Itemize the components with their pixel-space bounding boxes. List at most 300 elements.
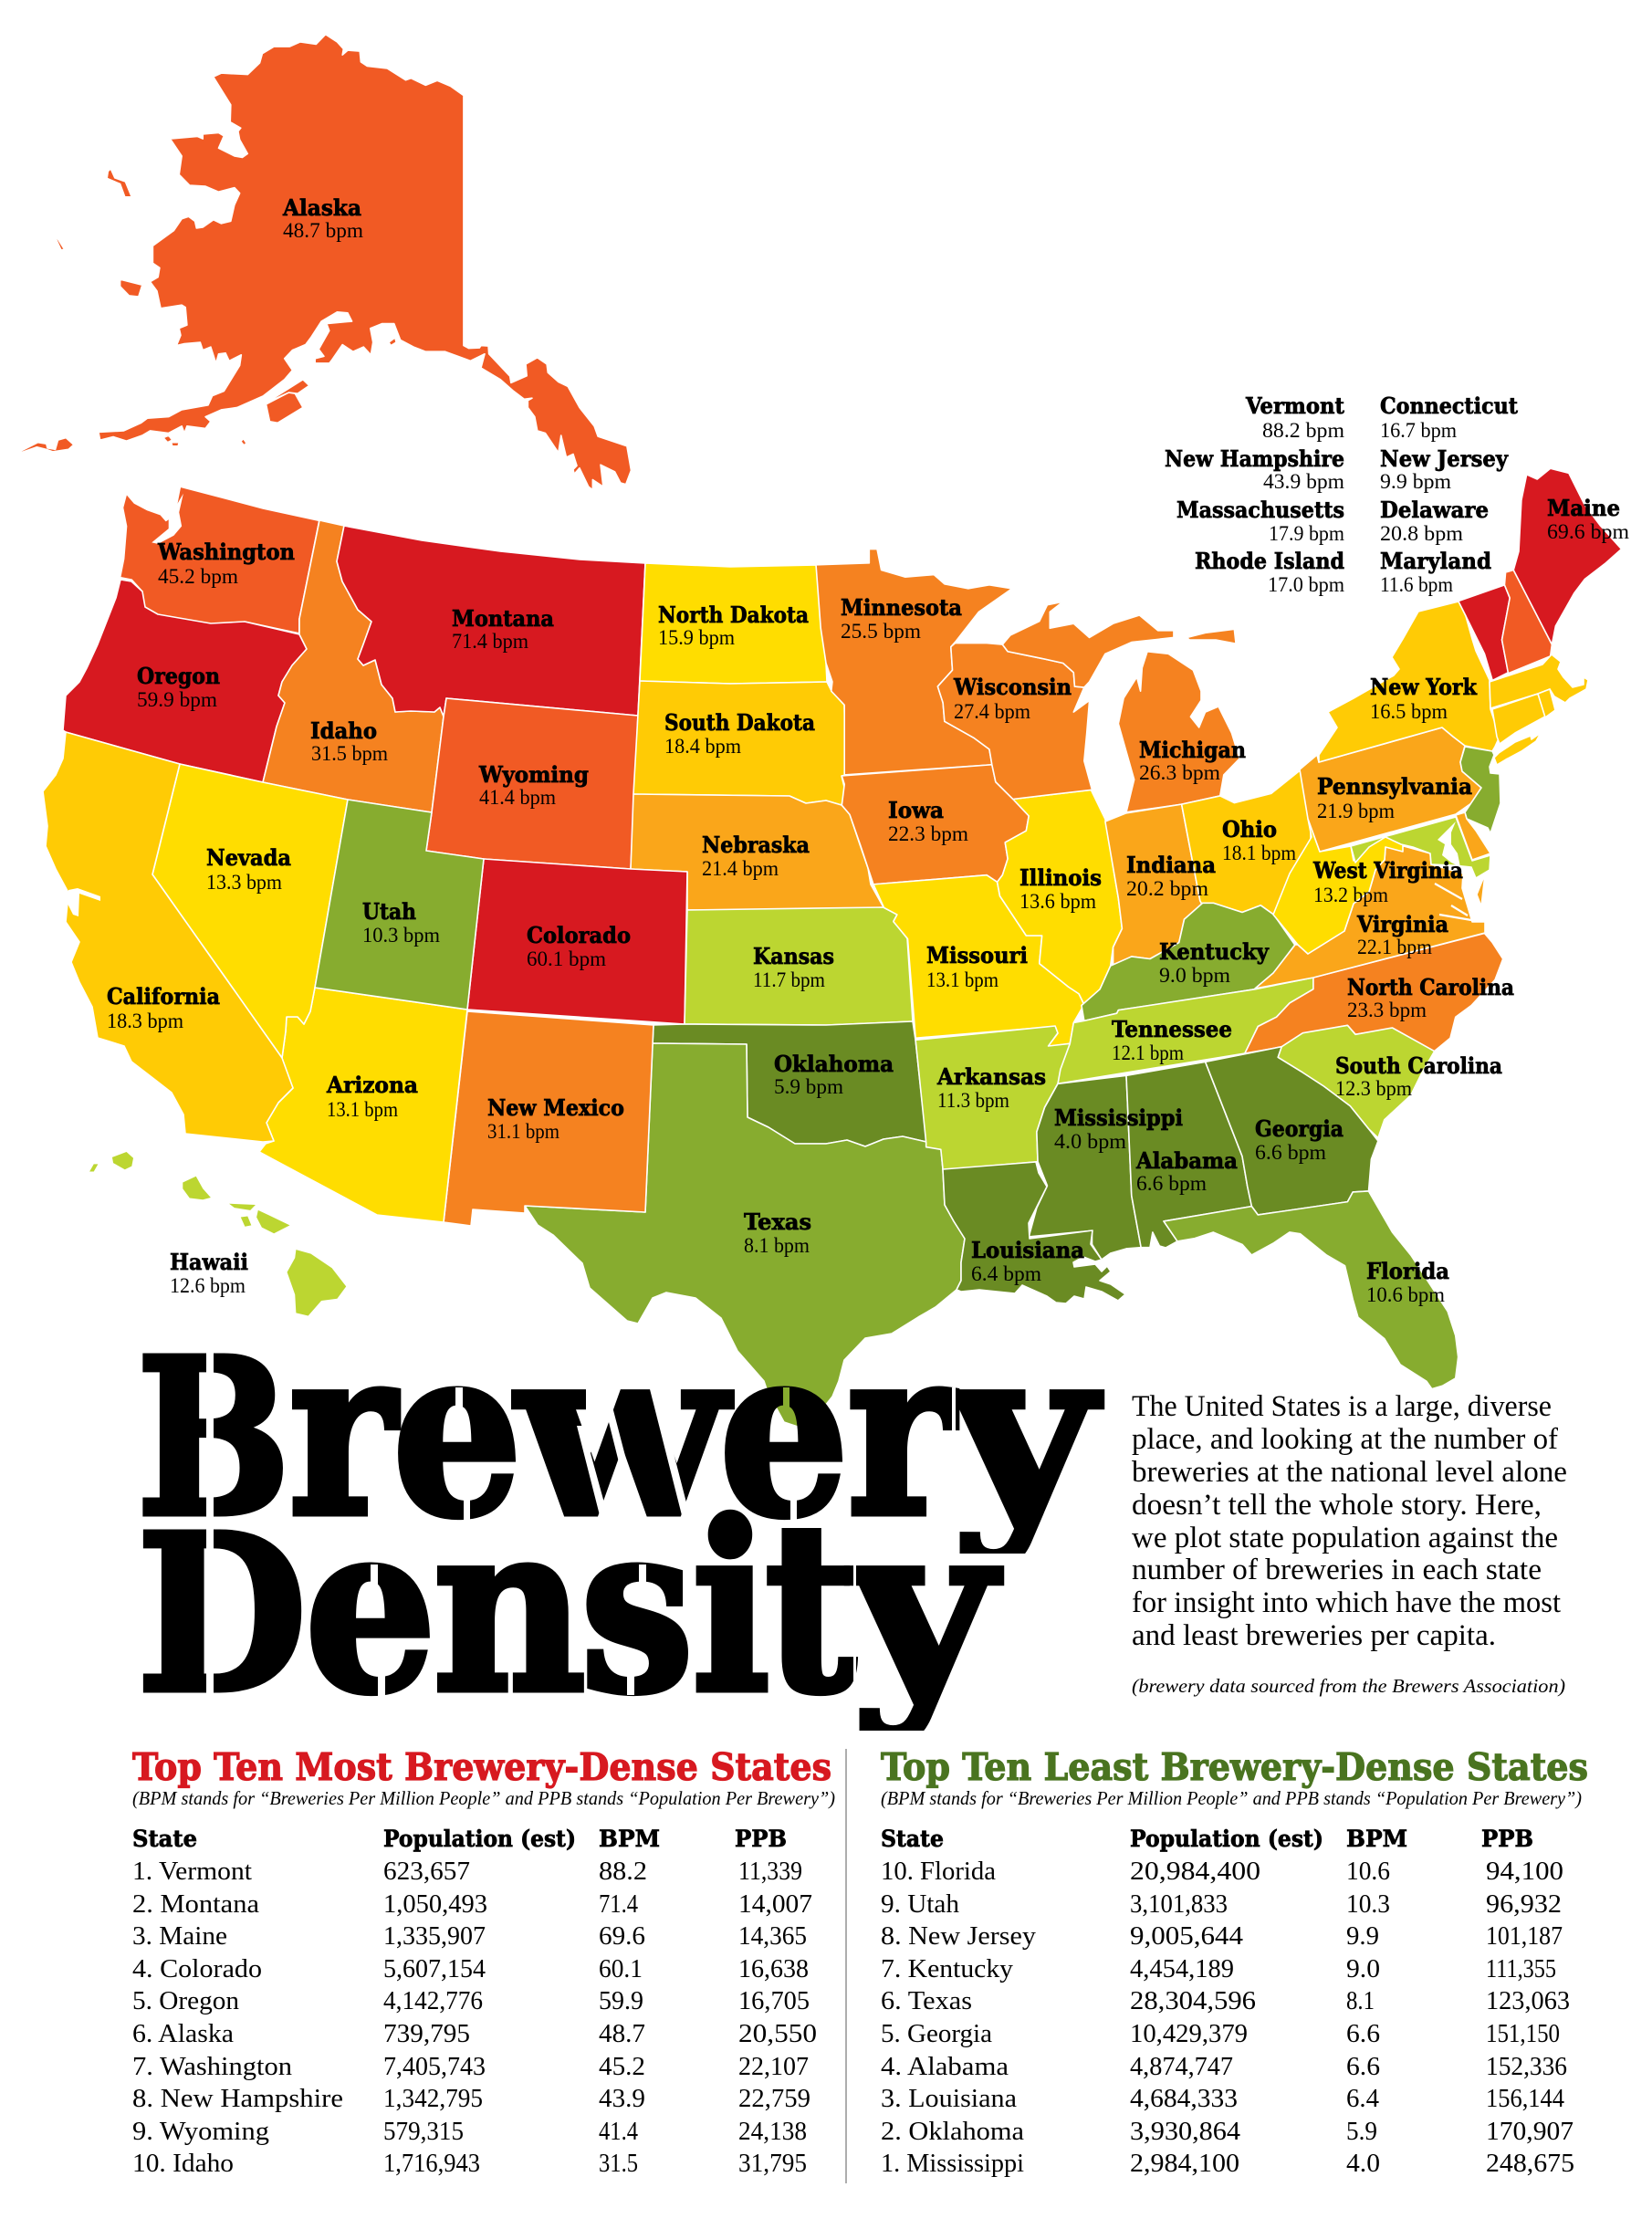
row 3: 1,335,907 <box>383 1921 486 1951</box>
title: Brewery Density: e <box>305 1472 436 1745</box>
label: Hawaii: Hawaii <box>170 1249 248 1275</box>
row 3: 3. Louisiana <box>881 2084 1017 2113</box>
label: Maryland: 11.6 bpm <box>1380 573 1453 597</box>
state: Washington <box>120 487 319 633</box>
label: Maryland <box>1380 548 1491 597</box>
label: Illinois: Illinois <box>1019 864 1102 891</box>
label: New Jersey: New Jersey <box>1380 445 1509 472</box>
inlets: Virginia tidal rivers <box>1435 884 1471 920</box>
state: Iowa <box>842 765 1029 884</box>
table: most brewery-dense states <box>132 1745 835 2178</box>
inlet: Chesapeake Bay <box>1438 821 1460 867</box>
row 2 <box>132 1889 812 1919</box>
label: Connecticut: Connecticut <box>1380 392 1518 419</box>
label: Pennsylvania: 21.9 bpm <box>1317 800 1395 823</box>
title: Brewery Density: B <box>137 1311 290 1564</box>
row 10: 20,984,400 <box>1130 1857 1260 1886</box>
row 9: 24,138 <box>738 2117 807 2146</box>
column headers: Population (est) <box>1130 1826 1323 1852</box>
label: Wisconsin <box>953 674 1072 724</box>
row 4: 4,874,747 <box>1130 2052 1233 2081</box>
label: New York: New York <box>1370 674 1478 700</box>
state: New Jersey <box>1460 747 1500 833</box>
label: Wyoming <box>478 761 589 810</box>
label: Colorado: Colorado <box>527 922 631 948</box>
label: Ohio: 18.1 bpm <box>1222 842 1296 865</box>
label: Kentucky: Kentucky <box>1159 938 1270 965</box>
label: New Hampshire: 43.9 bpm <box>1263 470 1344 494</box>
row 7: 4,454,189 <box>1130 1954 1234 1983</box>
label: South Dakota <box>664 709 815 759</box>
state: Alaska <box>19 35 631 490</box>
column headers: PPB <box>735 1826 787 1852</box>
label: South Carolina <box>1335 1052 1502 1101</box>
column headers: BPM <box>1346 1826 1407 1852</box>
label: Wyoming: Wyoming <box>478 761 589 788</box>
label: Connecticut: 16.7 bpm <box>1380 419 1457 443</box>
label: Maryland: Maryland <box>1380 548 1491 574</box>
row 5: 151,150 <box>1486 2019 1560 2048</box>
row 1: 248,675 <box>1486 2149 1574 2178</box>
label: Alaska <box>282 194 363 243</box>
title: Brewery Density <box>137 1296 1104 1753</box>
row 8: 1,342,795 <box>383 2084 483 2113</box>
column headers: BPM <box>599 1826 660 1852</box>
row 10 <box>881 1857 1563 1886</box>
label: Idaho: 31.5 bpm <box>311 742 388 766</box>
title: Brewery Density: i <box>692 1472 770 1745</box>
label: Missouri: 13.1 bpm <box>926 968 999 992</box>
label: Arizona <box>326 1072 418 1122</box>
row 7: 22,107 <box>738 2052 809 2081</box>
label: Oklahoma: Oklahoma <box>774 1051 894 1077</box>
row 2 <box>881 2117 1574 2146</box>
row 6: 6. Texas <box>881 1986 972 2015</box>
label: Delaware <box>1380 497 1489 546</box>
row 1: 88.2 <box>599 1857 647 1886</box>
label: North Carolina: 23.3 bpm <box>1347 999 1427 1022</box>
row 1: 11,339 <box>738 1857 802 1886</box>
row 8: 8. New Jersey <box>881 1921 1037 1951</box>
row 7 <box>132 2052 809 2081</box>
label: Nevada <box>206 844 291 895</box>
label: Alabama <box>1135 1147 1238 1196</box>
row 10: 10.6 <box>1346 1857 1390 1886</box>
label: Michigan: Michigan <box>1139 737 1246 763</box>
label: South Carolina: 12.3 bpm <box>1335 1077 1412 1101</box>
label: Vermont: Vermont <box>1245 392 1344 419</box>
state: Nebraska <box>631 794 884 910</box>
label: Utah: Utah <box>362 898 416 925</box>
state: Kansas <box>685 907 913 1025</box>
intro paragraph: number of breweries in each state <box>1132 1554 1542 1586</box>
intro paragraph: The United States is a large, diverse <box>1132 1390 1552 1423</box>
label: Alaska: Alaska <box>282 194 361 221</box>
row 7: 7. Kentucky <box>881 1954 1014 1983</box>
row 1 <box>881 2149 1574 2178</box>
label: Oregon <box>137 663 220 712</box>
map of the United States <box>19 35 1622 1427</box>
label: Utah <box>362 898 440 947</box>
label: Wyoming: 41.4 bpm <box>479 786 556 810</box>
row 8 <box>132 2084 810 2113</box>
label: New Jersey: 9.9 bpm <box>1380 470 1451 494</box>
label: Minnesota: Minnesota <box>841 594 962 621</box>
label: Florida <box>1366 1258 1449 1307</box>
state: Wyoming <box>426 698 638 869</box>
title: Brewery Density: n <box>433 1472 586 1745</box>
row 4: 6.6 <box>1346 2052 1380 2081</box>
label: Tennessee: Tennessee <box>1112 1016 1232 1042</box>
state: Tennessee <box>1058 978 1313 1083</box>
column headers <box>132 1826 787 1852</box>
label: Kansas <box>753 943 834 992</box>
row 10 <box>132 2149 807 2178</box>
label: Hawaii: 12.6 bpm <box>170 1274 246 1298</box>
state: North Dakota <box>640 563 827 684</box>
title: Brewery Density: r <box>847 1296 957 1569</box>
label: Missouri: Missouri <box>926 942 1028 968</box>
row 6 <box>881 1986 1570 2015</box>
inlet: San Francisco Bay <box>68 888 100 916</box>
label: Maine: Maine <box>1547 495 1620 521</box>
row 5: 59.9 <box>599 1986 643 2015</box>
label: Oklahoma <box>774 1051 894 1099</box>
label: Georgia: Georgia <box>1255 1115 1344 1142</box>
row 1: 4.0 <box>1346 2149 1380 2178</box>
label: North Carolina: North Carolina <box>1347 974 1514 1000</box>
row 5: 4,142,776 <box>383 1986 483 2015</box>
label: Oklahoma: 5.9 bpm <box>774 1075 843 1099</box>
label: Oregon: Oregon <box>137 663 220 689</box>
label: New Hampshire <box>1165 445 1344 494</box>
title: Brewery Density: e <box>392 1296 522 1569</box>
row 2: 3,930,864 <box>1130 2117 1241 2146</box>
state: Pennsylvania <box>1300 727 1481 852</box>
row 6 <box>132 2019 817 2048</box>
intro paragraph: we plot state population against the <box>1132 1522 1558 1554</box>
row 9: 3,101,833 <box>1130 1889 1228 1919</box>
label: Vermont <box>1245 392 1344 443</box>
label: Minnesota <box>841 594 962 644</box>
row 2: 170,907 <box>1486 2117 1574 2146</box>
state labels <box>107 194 1629 1307</box>
label: Virginia: 22.1 bpm <box>1357 936 1432 959</box>
label: Nebraska: Nebraska <box>702 832 810 858</box>
state: Missouri <box>873 875 1084 1046</box>
label: Montana: 71.4 bpm <box>452 630 528 654</box>
state: Delaware <box>1456 812 1490 860</box>
label: Arkansas <box>936 1063 1046 1113</box>
row 3: 14,365 <box>738 1921 807 1951</box>
label: New Mexico: New Mexico <box>487 1094 624 1121</box>
label: California <box>107 983 220 1033</box>
label: Pennsylvania: Pennsylvania <box>1317 773 1472 800</box>
state: West Virginia <box>1273 819 1403 954</box>
column divider <box>845 1749 847 2183</box>
label: South Dakota: 18.4 bpm <box>664 735 741 759</box>
label: Maine <box>1547 495 1629 544</box>
label: Kentucky <box>1159 938 1270 988</box>
label: Indiana: Indiana <box>1126 852 1216 878</box>
intro paragraph: and least breweries per capita. <box>1132 1619 1496 1652</box>
label: Rhode Island: Rhode Island <box>1195 548 1344 574</box>
state: New York <box>1319 602 1541 765</box>
state: Alabama <box>1126 1062 1251 1248</box>
label: Alaska: 48.7 bpm <box>283 219 363 243</box>
state: Indiana <box>1105 804 1203 966</box>
row 4 <box>881 2052 1567 2081</box>
row 4: 60.1 <box>599 1954 643 1983</box>
label: Hawaii <box>170 1249 248 1298</box>
label: Texas <box>744 1209 811 1258</box>
state: Idaho <box>263 520 444 812</box>
intro paragraph: place, and looking at the number of <box>1132 1423 1558 1456</box>
row 3: 6.4 <box>1346 2084 1379 2113</box>
label: Vermont: 88.2 bpm <box>1262 419 1344 443</box>
title: Brewery Density: y <box>947 1296 1102 1569</box>
label: Michigan <box>1139 737 1246 785</box>
label: Nevada: 13.3 bpm <box>206 871 282 895</box>
row 10: 10. Idaho <box>132 2149 234 2178</box>
label: Tennessee: 12.1 bpm <box>1112 1041 1184 1065</box>
row 4: 4. Alabama <box>881 2052 1009 2081</box>
label: Delaware: 20.8 bpm <box>1380 522 1463 546</box>
row 7: 45.2 <box>599 2052 645 2081</box>
label: Utah: 10.3 bpm <box>362 924 440 947</box>
row 5: 5. Oregon <box>132 1986 239 2015</box>
intro paragraph: breweries at the national level alone <box>1132 1456 1567 1489</box>
label: Connecticut <box>1380 392 1518 443</box>
row 9: 9. Wyoming <box>132 2117 269 2146</box>
row 7: 7,405,743 <box>383 2052 486 2081</box>
state: Hawaii <box>89 1152 346 1315</box>
label: Iowa <box>888 797 968 846</box>
label: Georgia: 6.6 bpm <box>1255 1141 1326 1165</box>
label: Wisconsin: 27.4 bpm <box>954 700 1030 724</box>
label: Indiana: 20.2 bpm <box>1126 877 1208 901</box>
label: Kansas: 11.7 bpm <box>753 968 825 992</box>
label: Montana: Montana <box>452 605 554 632</box>
label: Idaho <box>310 717 388 766</box>
row 9: 579,315 <box>383 2117 464 2146</box>
label: West Virginia: 13.2 bpm <box>1313 884 1388 907</box>
label: Kentucky: 9.0 bpm <box>1159 964 1230 988</box>
label: Louisiana <box>971 1237 1084 1286</box>
row 8: 43.9 <box>599 2084 645 2113</box>
state: New Hampshire <box>1502 570 1552 674</box>
note: abbreviations: (BPM stands for “Breweries Per Million People” and PPB stands “Population Per Brewery”) <box>132 1787 835 1809</box>
label: Washington: Washington <box>157 539 295 565</box>
row 6: 739,795 <box>383 2019 470 2048</box>
label: Rhode Island <box>1195 548 1344 597</box>
row 6: 48.7 <box>599 2019 645 2048</box>
row 9: 10.3 <box>1346 1889 1390 1919</box>
label: South Carolina: South Carolina <box>1335 1052 1502 1079</box>
row 7 <box>881 1954 1556 1983</box>
row 8: 9.9 <box>1346 1921 1379 1951</box>
row 8: 22,759 <box>738 2084 810 2113</box>
label: New York: 16.5 bpm <box>1370 700 1448 724</box>
label: Iowa: Iowa <box>888 797 944 823</box>
intro paragraph: for insight into which have the most <box>1132 1586 1561 1619</box>
label: Nebraska <box>702 832 810 881</box>
row 6: 6. Alaska <box>132 2019 234 2048</box>
row 3 <box>881 2084 1564 2113</box>
row 1: 2,984,100 <box>1130 2149 1239 2178</box>
state: Oklahoma <box>653 1021 926 1146</box>
label: Pennsylvania <box>1317 773 1472 823</box>
note: abbreviations: (BPM stands for “Breweries Per Million People” and PPB stands “Population Per Brewery”) <box>881 1787 1582 1809</box>
label: Idaho: Idaho <box>310 717 377 744</box>
title: Brewery Density: r <box>288 1296 398 1569</box>
label: Wisconsin: Wisconsin <box>953 674 1072 700</box>
row 6: 20,550 <box>738 2019 817 2048</box>
label: North Carolina <box>1347 974 1514 1022</box>
label: Virginia <box>1356 911 1448 959</box>
label: Mississippi: 4.0 bpm <box>1054 1130 1126 1154</box>
state: South Dakota <box>633 681 846 805</box>
state: Kentucky <box>1082 903 1295 1020</box>
source note: (brewery data sourced from the Brewers Association) <box>1132 1675 1565 1697</box>
label: Florida: Florida <box>1366 1258 1449 1284</box>
label: North Dakota: North Dakota <box>658 602 809 628</box>
label: Texas: 8.1 bpm <box>744 1234 810 1258</box>
column headers: Population (est) <box>383 1826 576 1852</box>
row 10: 31,795 <box>738 2149 807 2178</box>
state: Mississippi <box>1029 1075 1141 1260</box>
row 10: 1,716,943 <box>383 2149 480 2178</box>
state: Vermont <box>1459 585 1510 680</box>
row 4: 152,336 <box>1486 2052 1567 2081</box>
row 3 <box>132 1921 807 1951</box>
state: Florida <box>1164 1191 1459 1389</box>
row 6: 28,304,596 <box>1130 1986 1256 2015</box>
row 9: 41.4 <box>599 2117 638 2146</box>
label: New Mexico: 31.1 bpm <box>487 1120 559 1144</box>
row 2: 14,007 <box>738 1889 812 1919</box>
state: Wisconsin <box>937 644 1092 800</box>
row 5 <box>881 2019 1560 2048</box>
heading: least dense: Top Ten Least Brewery-Dense States <box>881 1745 1588 1789</box>
state: Illinois <box>998 790 1122 1005</box>
state: Colorado <box>467 859 687 1024</box>
column headers <box>881 1826 1533 1852</box>
label: New York <box>1370 674 1478 724</box>
row 8: 8. New Hampshire <box>132 2084 343 2113</box>
state: Oregon <box>63 580 307 782</box>
row 10: 10. Florida <box>881 1857 996 1886</box>
label: West Virginia: West Virginia <box>1312 857 1463 884</box>
state: Georgia <box>1206 1047 1378 1215</box>
label: California: 18.3 bpm <box>107 1010 183 1033</box>
state: Arkansas <box>915 1026 1070 1170</box>
row 6: 8.1 <box>1346 1986 1375 2015</box>
row 3: 3. Maine <box>132 1921 227 1951</box>
row 9 <box>881 1889 1562 1919</box>
row 5: 5. Georgia <box>881 2019 992 2048</box>
state: South Carolina <box>1278 1025 1435 1138</box>
label: Louisiana: 6.4 bpm <box>971 1262 1041 1286</box>
label: Alabama: 6.6 bpm <box>1136 1172 1207 1196</box>
state: California <box>43 732 293 1142</box>
state: New Mexico <box>444 1011 653 1226</box>
label: Montana <box>452 605 554 654</box>
state: Utah <box>315 800 484 1010</box>
label: Louisiana: Louisiana <box>971 1237 1084 1263</box>
label: Nebraska: 21.4 bpm <box>702 857 779 881</box>
label: Arizona: Arizona <box>326 1072 418 1098</box>
row 10: 94,100 <box>1486 1857 1563 1886</box>
label: Mississippi: Mississippi <box>1054 1104 1183 1131</box>
state: Ohio <box>1182 770 1311 915</box>
row 8: 101,187 <box>1486 1921 1563 1951</box>
row 4: 16,638 <box>738 1954 809 1983</box>
row 7: 111,355 <box>1486 1954 1556 1983</box>
label: Minnesota: 25.5 bpm <box>841 620 921 644</box>
row 8 <box>881 1921 1563 1951</box>
row 10: 31.5 <box>599 2149 638 2178</box>
label: Illinois: 13.6 bpm <box>1019 890 1096 914</box>
label: Illinois <box>1019 864 1102 914</box>
label: California: California <box>107 983 220 1010</box>
state: Texas <box>525 1043 965 1427</box>
label: Mississippi <box>1054 1104 1183 1154</box>
label: North Dakota: 15.9 bpm <box>658 626 735 650</box>
label: Washington: 45.2 bpm <box>158 565 238 589</box>
label: Arkansas: 11.3 bpm <box>937 1089 1009 1113</box>
row 3: 4,684,333 <box>1130 2084 1238 2113</box>
row 7: 7. Washington <box>132 2052 293 2081</box>
label: New Jersey <box>1380 445 1509 494</box>
label: Massachusetts <box>1176 497 1344 546</box>
row 7: 9.0 <box>1346 1954 1380 1983</box>
label: Florida: 10.6 bpm <box>1366 1283 1445 1307</box>
label: Washington <box>157 539 295 589</box>
row 9 <box>132 2117 807 2146</box>
title: Brewery Density: e <box>719 1296 849 1569</box>
state: Arizona <box>259 988 467 1222</box>
row 3: 69.6 <box>599 1921 645 1951</box>
state: Nevada <box>152 764 348 1058</box>
label: Virginia: Virginia <box>1356 911 1448 937</box>
row 2: 71.4 <box>599 1889 638 1919</box>
state: Rhode Island <box>1538 689 1555 717</box>
state: Maine <box>1513 468 1622 644</box>
state: Virginia <box>1255 846 1485 989</box>
stencil gaps in title <box>206 1349 956 1698</box>
row 3: 156,144 <box>1486 2084 1564 2113</box>
inlet: Puget Sound <box>152 494 183 544</box>
heading: most dense: Top Ten Most Brewery-Dense States <box>132 1745 831 1789</box>
row 2: 1,050,493 <box>383 1889 487 1919</box>
title: Brewery Density: w <box>514 1296 732 1569</box>
intro paragraph: doesn’t tell the whole story. Here, <box>1132 1489 1542 1522</box>
label: Tennessee <box>1112 1016 1232 1065</box>
row 2: 2. Montana <box>132 1889 259 1919</box>
row 1 <box>132 1857 802 1886</box>
label: Delaware: Delaware <box>1380 497 1489 523</box>
label: Nevada: Nevada <box>206 844 291 871</box>
label: Arkansas: Arkansas <box>936 1063 1046 1090</box>
state: Massachusetts <box>1490 654 1588 708</box>
label: Michigan: 26.3 bpm <box>1139 761 1220 785</box>
label: Alabama: Alabama <box>1135 1147 1238 1174</box>
label: Georgia <box>1255 1115 1344 1165</box>
label: South Dakota: South Dakota <box>664 709 815 736</box>
label: Indiana <box>1126 852 1216 901</box>
row 1: 623,657 <box>383 1857 470 1886</box>
